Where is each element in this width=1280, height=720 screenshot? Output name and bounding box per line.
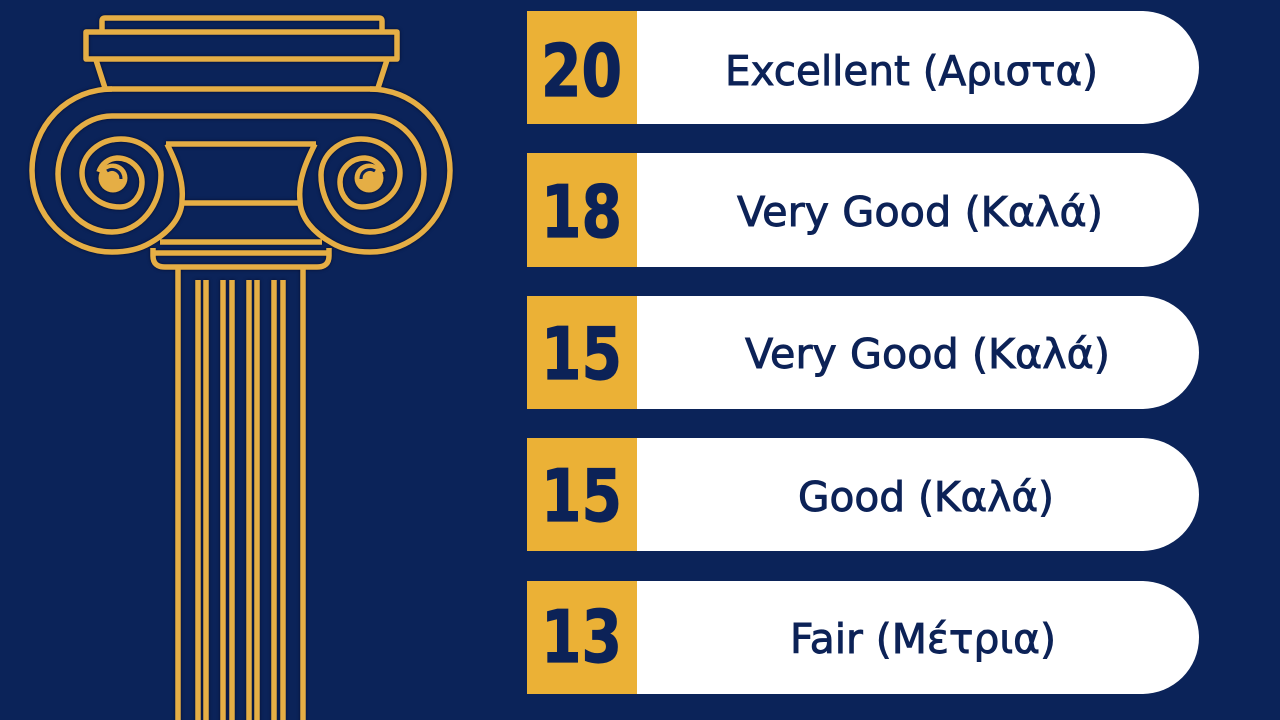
score row: 15 Very Good: 15 [541,312,622,396]
score row: 20 Excellent: 20 [541,29,622,113]
score row: 13 Fair: 13 [541,595,622,679]
score row: 15 Good: Good (Καλά) [798,473,1054,521]
score row: 15 Very Good: Very Good (Καλά) [745,330,1110,378]
right volute [300,89,450,252]
score row: 15 Very Good [527,296,1199,409]
score row: 13 Fair: Fair (Μέτρια) [790,615,1056,663]
left volute [32,89,182,252]
score row: 20 Excellent: Excellent (Αριστα) [725,47,1098,95]
score row: 18 Very Good: 18 [541,170,622,254]
score row: 20 Excellent [527,11,1199,124]
score row: 13 Fair [527,581,1199,694]
score row: 18 Very Good: Very Good (Καλά) [737,188,1103,236]
column shaft with flutes [178,267,303,720]
score row: 15 Good: 15 [541,454,622,538]
column capital top mouldings [86,18,397,116]
score row: 18 Very Good [527,153,1199,267]
score row: 15 Good [527,438,1199,551]
capital centre and necking [153,144,329,267]
icon: ionic column [32,18,450,720]
